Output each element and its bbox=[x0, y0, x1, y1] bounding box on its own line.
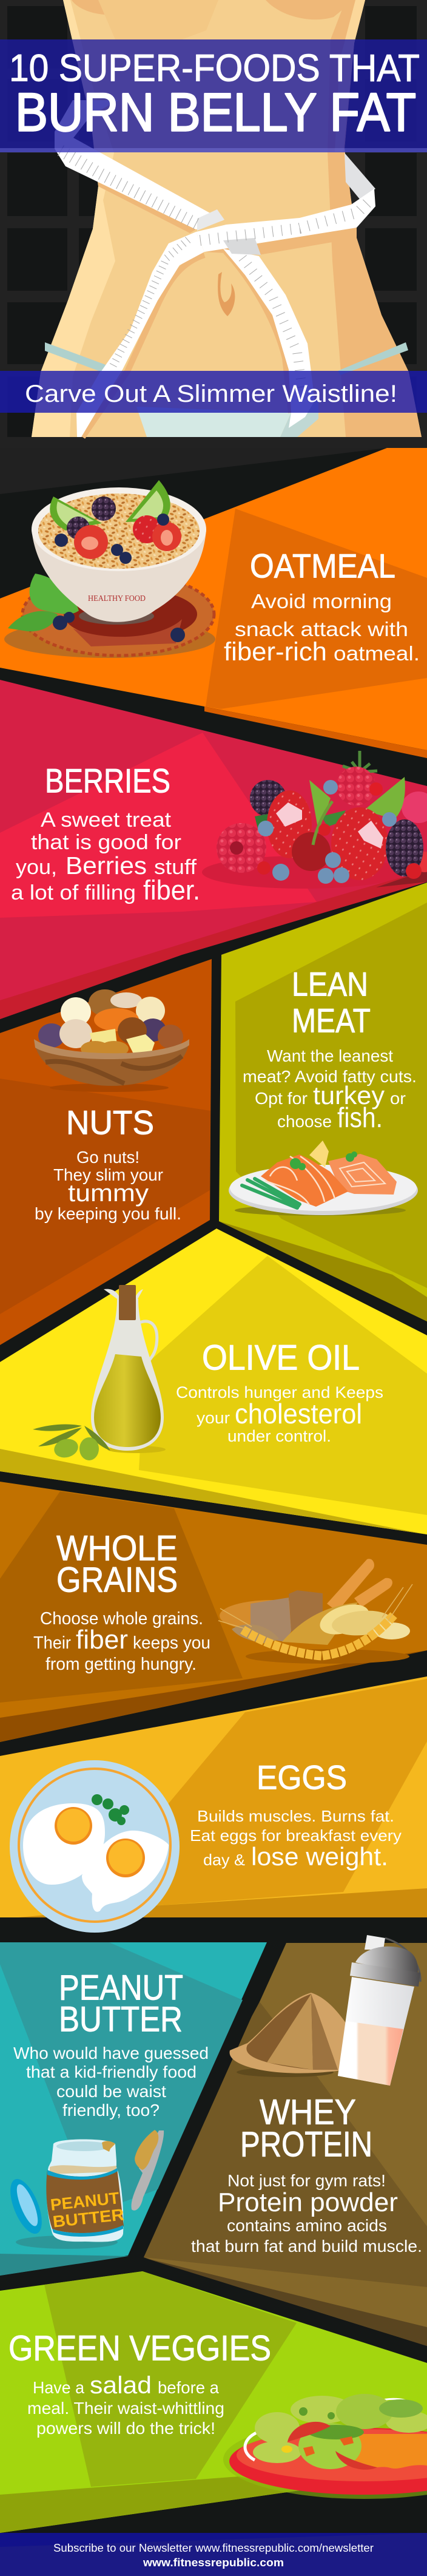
panel background bbox=[0, 2271, 427, 2533]
text: green veggies: meal. Their waist-whittling bbox=[27, 2399, 224, 2418]
text: whole grains bbox=[33, 1528, 210, 1674]
panel: whey protein bbox=[144, 1935, 427, 2346]
text: peanut butter: that a kid-friendly food bbox=[26, 2062, 197, 2081]
text: olive oil: under control. bbox=[227, 1427, 331, 1445]
text: oatmeal: OATMEAL bbox=[250, 546, 395, 585]
illustration: berries bbox=[202, 751, 427, 889]
text: lean meat: Want the leanest bbox=[267, 1046, 393, 1065]
text: whey protein: Protein powder bbox=[218, 2188, 398, 2217]
panel background bbox=[0, 1942, 267, 2276]
text: eggs: EGGS bbox=[257, 1758, 347, 1797]
text: lean meat: Opt for bbox=[255, 1089, 308, 1108]
text: lean meat bbox=[243, 965, 417, 1133]
newsletter line: Subscribe to our Newsletter www.fitnessrepublic.com/newsletter bbox=[53, 2542, 374, 2554]
panel: nuts bbox=[0, 959, 212, 1345]
text: berries: you, bbox=[16, 856, 57, 879]
panel background bbox=[0, 680, 427, 1019]
text: peanut butter: could be waist bbox=[56, 2082, 166, 2101]
text: whole grains: WHOLE bbox=[56, 1528, 178, 1568]
text: nuts: by keeping you full. bbox=[35, 1204, 181, 1223]
text: whole grains: Their bbox=[33, 1633, 71, 1653]
footer bbox=[0, 2533, 427, 2576]
text: lean meat: fish. bbox=[337, 1102, 383, 1133]
illustration: torso with measuring tape bbox=[32, 0, 422, 437]
illustration: bread and wheat bbox=[218, 1559, 412, 1664]
text: green veggies: salad bbox=[90, 2372, 152, 2399]
panel: green veggies bbox=[0, 2271, 427, 2533]
text: eggs: lose weight. bbox=[251, 1842, 388, 1871]
panel: lean meat bbox=[219, 883, 427, 1321]
illustration: salad plate bbox=[223, 2394, 427, 2499]
text: whole grains: keeps you bbox=[133, 1633, 210, 1653]
text: oatmeal: Avoid morning bbox=[251, 590, 392, 612]
text: oatmeal: fiber-rich bbox=[224, 637, 327, 666]
bowl label: HEALTHY FOOD bbox=[88, 594, 146, 603]
text: lean meat: MEAT bbox=[292, 1002, 371, 1039]
text: berries: a lot of filling bbox=[11, 881, 136, 904]
panel background bbox=[219, 883, 427, 1321]
jar label text bbox=[50, 2189, 125, 2231]
text: oatmeal bbox=[224, 546, 420, 666]
subtitle band: Carve Out A Slimmer Waistline! bbox=[25, 381, 397, 407]
text: peanut butter bbox=[13, 1968, 209, 2120]
text: olive oil bbox=[176, 1338, 383, 1445]
panel background bbox=[144, 1943, 427, 2346]
website line: www.fitnessrepublic.com bbox=[143, 2557, 284, 2569]
text: berries: that is good for bbox=[31, 831, 181, 854]
illustration: protein shaker and powder bbox=[230, 1935, 420, 2086]
text: whole grains: Choose whole grains. bbox=[40, 1609, 203, 1629]
text: oatmeal: oatmeal. bbox=[334, 642, 420, 665]
text: lean meat: or bbox=[390, 1089, 406, 1108]
text: whole grains: fiber bbox=[76, 1625, 128, 1655]
text: peanut butter: BUTTER bbox=[59, 1999, 183, 2039]
text: eggs: Builds muscles. Burns fat. bbox=[197, 1807, 394, 1825]
text: peanut butter: PEANUT bbox=[59, 1968, 183, 2008]
text: whey protein: that burn fat and build muscle. bbox=[191, 2237, 422, 2256]
panel: header hero bbox=[0, 0, 427, 448]
text: whey protein bbox=[191, 2093, 422, 2256]
text: nuts bbox=[35, 1103, 181, 1223]
text: lean meat: turkey bbox=[313, 1081, 385, 1110]
text: nuts: NUTS bbox=[66, 1103, 154, 1141]
text: berries: BERRIES bbox=[45, 761, 170, 800]
title bbox=[9, 47, 420, 143]
panel background bbox=[0, 448, 427, 758]
panel background bbox=[0, 959, 212, 1345]
panel: oatmeal bbox=[0, 448, 427, 758]
panel background bbox=[0, 1229, 427, 1534]
illustration: nut bowl bbox=[34, 989, 189, 1092]
panel: eggs bbox=[0, 1676, 427, 1942]
text: nuts: They slim your bbox=[53, 1165, 163, 1184]
illustration: oatmeal bowl bbox=[4, 480, 215, 658]
text: whole grains: from getting hungry. bbox=[45, 1655, 197, 1674]
text: green veggies: GREEN VEGGIES bbox=[8, 2328, 271, 2368]
text: berries: Berries bbox=[66, 852, 147, 880]
text: peanut butter: Who would have guessed bbox=[13, 2044, 209, 2062]
text: nuts: Go nuts! bbox=[76, 1148, 140, 1167]
panel: peanut butter bbox=[0, 1942, 267, 2276]
illustration: salmon plate bbox=[229, 1141, 418, 1216]
text: berries bbox=[11, 761, 200, 906]
subtitle band bbox=[0, 371, 427, 413]
panel background bbox=[0, 1482, 427, 1742]
text: lean meat: meat? Avoid fatty cuts. bbox=[243, 1067, 417, 1086]
text: olive oil: Controls hunger and Keeps bbox=[176, 1383, 383, 1402]
text: eggs: day & bbox=[203, 1851, 245, 1869]
text: berries: stuff bbox=[154, 856, 197, 879]
panel background bbox=[0, 1676, 427, 1917]
text: olive oil: OLIVE OIL bbox=[202, 1338, 360, 1378]
panel: berries bbox=[0, 680, 427, 1019]
text: olive oil: cholesterol bbox=[235, 1398, 362, 1429]
text: lean meat: choose bbox=[277, 1112, 332, 1131]
text: berries: fiber. bbox=[143, 875, 200, 906]
text: eggs: Eat eggs for breakfast every bbox=[190, 1826, 402, 1845]
illustration: fried eggs plate bbox=[0, 1760, 182, 1942]
text: green veggies bbox=[8, 2328, 271, 2438]
illustration: peanut butter jar bbox=[4, 2130, 164, 2249]
text: whey protein: WHEY bbox=[260, 2093, 356, 2132]
text: berries: A sweet treat bbox=[41, 808, 172, 832]
text: oatmeal: snack attack with bbox=[235, 618, 408, 640]
panel: olive oil bbox=[0, 1229, 427, 1534]
text: peanut butter: friendly, too? bbox=[62, 2101, 160, 2120]
panel: whole grains bbox=[0, 1482, 427, 1742]
background window grid bbox=[0, 0, 427, 448]
text: eggs bbox=[190, 1758, 402, 1871]
text: green veggies: before a bbox=[158, 2378, 219, 2397]
text: nuts: tummy bbox=[68, 1180, 149, 1207]
text: whey protein: Not just for gym rats! bbox=[227, 2171, 386, 2190]
text: green veggies: Have a bbox=[33, 2378, 84, 2397]
jar label text: PEANUT bbox=[50, 2189, 121, 2214]
jar label text: BUTTER bbox=[52, 2205, 125, 2231]
text: lean meat: LEAN bbox=[292, 965, 368, 1003]
text: whey protein: PROTEIN bbox=[240, 2124, 372, 2164]
title band bbox=[0, 39, 427, 152]
illustration: olive oil bottle bbox=[33, 1285, 166, 1460]
text: whey protein: contains amino acids bbox=[227, 2216, 387, 2235]
text: whole grains: GRAINS bbox=[56, 1560, 178, 1600]
text: green veggies: powers will do the trick! bbox=[36, 2419, 215, 2438]
text: olive oil: your bbox=[197, 1409, 230, 1427]
